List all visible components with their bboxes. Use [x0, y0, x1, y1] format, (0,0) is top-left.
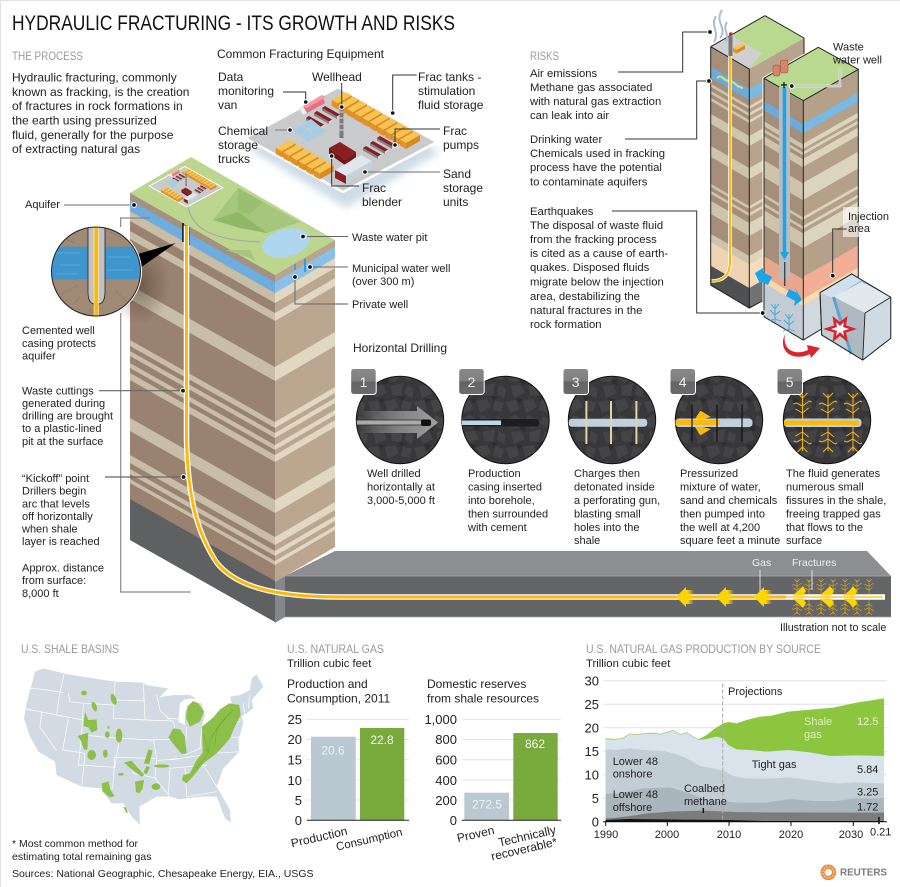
panel: tower A, gas well [707, 10, 804, 308]
well pipe: vertical drilling curving horizontal [186, 226, 885, 597]
equipment labels: stimulation [418, 84, 475, 98]
equipment callout lines [275, 75, 440, 186]
equipment labels: pumps [443, 138, 479, 152]
labels: left side: Waste cuttings [22, 386, 94, 398]
labels: left side: off horizontally [22, 511, 93, 523]
heading: production by source [586, 642, 821, 670]
text block: risks: from the fracking process [530, 234, 657, 246]
equipment labels: van [218, 98, 237, 112]
step 4: pressurized mixture: sand and chemicals [680, 495, 778, 507]
area: coalbed methane [606, 811, 884, 822]
text block: the process: known as fracking, is the creation [12, 85, 189, 99]
bar chart: production and consumption 2011 [287, 677, 409, 854]
label: injection area: Injection [848, 211, 889, 223]
labels: left side: from surface: [22, 575, 86, 587]
equipment labels: blender [362, 195, 402, 209]
step 1: well drilled horizontally: Well drilled [367, 468, 421, 480]
text block: risks: can leak into air [530, 110, 609, 122]
text block: the process: fluid, generally for the purpose [12, 128, 174, 142]
bar chart: domestic reserves: Domestic reserves [427, 677, 526, 691]
heading: equipment: Common Fracturing Equipment [217, 47, 385, 61]
footnote and sources: * Most common method for [12, 838, 139, 850]
text block: risks: with natural gas extraction [529, 96, 661, 108]
equipment labels [218, 70, 484, 209]
injection arrows [755, 268, 802, 306]
bar chart: domestic reserves [424, 677, 561, 864]
disposal well shaft [779, 87, 790, 280]
labels: left side: to a plastic-lined [22, 423, 102, 435]
label: injection area [831, 207, 889, 278]
step 4: pressurized mixture: square feet a minute [680, 535, 780, 547]
fault cube detail [820, 274, 891, 360]
heading: production by source: Trillion cubic feet [586, 658, 671, 670]
step 3: perforating charges: shale [574, 535, 600, 547]
badge 3 [563, 368, 588, 394]
labels: left side: when shale [21, 524, 78, 536]
step 5: fissures release gas: that flows to the [786, 522, 863, 534]
badge 2 [459, 368, 484, 394]
badge 2: 2 [468, 374, 476, 390]
step 1: well drilled horizontally: horizontally at [367, 482, 435, 494]
equipment labels: Frac [362, 181, 386, 195]
area chart: natural gas production by source: 2010 [717, 829, 741, 841]
text block: risks: to contaminate aquifers [530, 176, 648, 188]
labels: surface water [352, 232, 450, 311]
area chart: natural gas production by source: 2030 [839, 829, 863, 841]
labels: left side: aquifer [22, 350, 56, 362]
labels: left side: Aquifer [25, 199, 60, 211]
Reuters logo [820, 864, 887, 880]
labels: left side: generated during [22, 398, 105, 410]
step 4: pressurized mixture: Pressurized [680, 468, 738, 480]
area chart: natural gas production by source: 30 [585, 674, 599, 688]
labels: left side: pit at the surface [22, 436, 103, 448]
labels: left side: drilling are brought [22, 410, 113, 422]
labels: left side: “Kickoff” point [22, 473, 89, 485]
badge 4: 4 [679, 374, 687, 390]
bar chart: domestic reserves: 0 [450, 813, 457, 828]
step 5: fissures release gas: surface [786, 535, 822, 547]
text block: risks: Air emissions [530, 68, 598, 80]
text block: risks: Earthquakes [530, 206, 594, 218]
labels: left side: Cemented well [22, 325, 95, 337]
area chart: natural gas production by source: 5.84 [857, 764, 878, 776]
labels: left side: 8,000 ft [22, 588, 59, 600]
labels: left side: casing protects [22, 338, 96, 350]
step 3: perforating charges: blasting small [574, 508, 641, 520]
panel: rock block cross-section [110, 157, 335, 622]
Reuters logo: REUTERS [840, 867, 887, 879]
map: U.S. shale basins [24, 668, 263, 825]
area chart: natural gas production by source: Lower 48 [613, 756, 658, 768]
step 4: pressurized mixture: then pumped into [680, 508, 765, 520]
text block: risks: quakes. Disposed fluids [530, 262, 650, 274]
air emission plume [714, 10, 727, 42]
labels: left side: arc that levels [22, 498, 90, 510]
step 5: fissures release gas: freeing trapped gas [786, 508, 881, 520]
area chart: natural gas production by source: gas [804, 729, 822, 741]
icon: red rotation arrow [783, 334, 820, 358]
area: lower 48 offshore [606, 787, 884, 822]
labels: surface water: Waste water pit [352, 232, 427, 244]
text block: risks: natural fractures in the [530, 305, 642, 317]
area: lower 48 onshore [606, 748, 884, 822]
area chart: natural gas production by source: Coalbed [684, 783, 725, 795]
area chart: natural gas production by source: onshore [613, 768, 652, 780]
text block: the process: of fractures in rock formations in [12, 99, 183, 113]
step 5: fissures release gas: numerous small [786, 482, 864, 494]
text block: risks: process have the potential [530, 162, 662, 174]
heading: U.S. natural gas [287, 642, 384, 670]
gas flow arrows and fractures in shale [676, 579, 885, 615]
footnote and sources [12, 838, 314, 880]
area chart: natural gas production by source: Projections [728, 686, 783, 698]
labels: surface water: (over 300 m) [352, 276, 414, 288]
equipment pad illustration [245, 87, 437, 192]
step 2: production casing [459, 368, 549, 534]
equipment labels: storage [218, 138, 258, 152]
heading: U.S. natural gas: Trillion cubic feet [287, 658, 372, 670]
step 4: pressurized mixture: the well at 4,200 [680, 522, 760, 534]
shale labels: Fractures [792, 557, 836, 569]
area chart: natural gas production by source: Shale [804, 716, 832, 728]
bar chart: production and consumption 2011: Consumption [335, 827, 404, 854]
badge 4 [670, 368, 696, 394]
footnote and sources: Sources: National Geographic, Chesapeake Energy, EIA., USGS [12, 868, 314, 880]
area chart: natural gas production by source: 3.25 [857, 786, 878, 798]
waste well callout [793, 67, 840, 86]
area chart: natural gas production by source: offshore [613, 802, 652, 814]
footnote and sources: estimating total remaining gas [12, 851, 152, 863]
step 5: fissures release gas [777, 368, 886, 547]
bar chart: production and consumption 2011: 20.6 [321, 744, 345, 758]
bar chart: production and consumption 2011: 5 [295, 793, 302, 808]
area chart: natural gas production by source: 25 [585, 697, 599, 712]
text block: risks: migrate below the injection [530, 276, 664, 288]
equipment labels: Frac [443, 124, 467, 138]
area chart: natural gas production by source: 2000 [655, 829, 679, 841]
callout: casing magnifier [50, 224, 176, 319]
equipment labels: Wellhead [312, 70, 362, 84]
note: illustration not to scale: Illustration not to scale [780, 622, 886, 634]
step 2: production casing: Production [468, 468, 521, 480]
bar chart: domestic reserves: Proven [455, 823, 496, 845]
badge 1: 1 [360, 374, 368, 390]
bar chart: production and consumption 2011: Production [290, 824, 349, 850]
area chart: natural gas production by source [585, 674, 891, 841]
text block: risks: Chemicals used in fracking [530, 148, 665, 160]
bar chart: domestic reserves: 272.5 [472, 798, 502, 812]
labels: left side [21, 199, 113, 600]
step 2: production casing: with cement [467, 522, 527, 534]
text block: the process [12, 49, 189, 156]
step 4: pressurized mixture [670, 368, 780, 547]
equipment labels: Frac tanks - [418, 70, 481, 84]
equipment labels: Sand [443, 167, 471, 181]
step 2: production casing: into borehole, [468, 495, 535, 507]
area chart: natural gas production by source: methane [684, 796, 727, 808]
labels: left side: Approx. distance [22, 562, 104, 574]
bar chart: production and consumption 2011: 25 [288, 712, 302, 727]
label: waste water well: water well [832, 54, 882, 66]
panel: tower B, waste water well [755, 47, 858, 340]
area chart: natural gas production by source: 0.21 [870, 827, 891, 839]
heading: U.S. natural gas: U.S. NATURAL GAS [287, 642, 384, 656]
equipment labels: trucks [218, 152, 250, 166]
area chart: natural gas production by source: 15 [585, 744, 599, 759]
blue fractures [769, 304, 781, 322]
step 3: perforating charges: detonated inside [574, 482, 655, 494]
text block: risks: The disposal of waste fluid [530, 220, 663, 232]
labels: surface water: Private well [352, 299, 408, 311]
text block: risks: Methane gas associated [530, 82, 652, 94]
area chart: natural gas production by source: 1990 [594, 829, 618, 841]
labels: left side: layer is reached [22, 536, 100, 548]
callout lines: left side [64, 203, 348, 592]
tower A right face [749, 38, 804, 308]
text block: the process: the earth using pressurized [12, 114, 157, 128]
step 4: pressurized mixture: mixture of water, [680, 482, 761, 494]
equipment labels: storage [443, 181, 483, 195]
tower B right face [803, 70, 858, 340]
shale labels [752, 557, 836, 592]
contaminant squiggle [717, 76, 743, 88]
equipment labels: units [443, 195, 468, 209]
earthquake burst [823, 316, 857, 342]
bar chart: domestic reserves: 800 [435, 732, 457, 747]
well casing through aquifer [183, 223, 189, 245]
step 2: production casing: then surrounded [468, 508, 548, 520]
waste tanks [773, 60, 788, 76]
bar chart: production and consumption 2011: 20 [288, 732, 302, 747]
text block: risks: rock formation [530, 319, 602, 331]
equipment labels: fluid storage [418, 98, 484, 112]
step 1: well drilled horizontally: 3,000-5,000 ft [367, 495, 435, 507]
bar chart: production and consumption 2011: Production and [287, 677, 368, 691]
area chart: natural gas production by source: 12.5 [857, 716, 878, 728]
shale labels: Gas [752, 557, 771, 569]
labels: left side: Drillers begin [22, 486, 86, 498]
heading: production by source: U.S. NATURAL GAS PRODUCTION BY SOURCE [586, 642, 821, 656]
bar chart: production and consumption 2011: 15 [288, 752, 302, 768]
label: waste water well: Waste [833, 42, 864, 54]
area: shale gas [606, 698, 884, 822]
text block: risks: RISKS [530, 49, 559, 63]
step 5: fissures release gas: fissures in the shale, [786, 495, 886, 507]
step 1: well drilled horizontally [351, 368, 444, 507]
text block: the process: THE PROCESS [12, 49, 83, 63]
left face strata [130, 193, 275, 622]
bar chart: domestic reserves: Technically [497, 823, 557, 850]
label: injection area: area [848, 223, 871, 235]
heading: U.S. shale basins: U.S. SHALE BASINS [21, 642, 119, 656]
area chart: natural gas production by source: Lower 48 [613, 789, 658, 801]
equipment labels: Chemical [218, 124, 268, 138]
bar chart: domestic reserves: 862 [525, 737, 545, 751]
right face strata [275, 240, 335, 582]
bar chart: domestic reserves: 600 [435, 752, 457, 768]
equipment labels: Data [218, 70, 244, 84]
badge 5: 5 [786, 374, 794, 390]
labels: surface water: Municipal water well [352, 263, 450, 275]
area: other [606, 819, 884, 822]
area chart: natural gas production by source: 10 [585, 768, 599, 782]
area chart: natural gas production by source: 1.72 [857, 802, 878, 814]
label: waste water well [832, 42, 882, 66]
area chart: natural gas production by source: Tight gas [752, 759, 797, 771]
step 2: production casing: casing inserted [468, 482, 542, 494]
badge 3: 3 [572, 374, 580, 390]
step 3: perforating charges: Charges then [574, 468, 640, 480]
panel: common fracturing equipment [217, 47, 484, 209]
heading: horizontal drilling: Horizontal Drilling [353, 341, 447, 355]
bar chart: domestic reserves: 400 [435, 773, 457, 788]
equipment labels: monitoring [218, 84, 274, 98]
bar chart: production and consumption 2011: 22.8 [370, 733, 394, 747]
step 5: fissures release gas: The fluid generates [786, 468, 881, 480]
title: HYDRAULIC FRACTURING - ITS GROWTH AND RISKS [12, 12, 455, 35]
gas well pipe [712, 55, 730, 281]
tower A left face [711, 47, 749, 308]
badge 5 [777, 368, 802, 394]
bar chart: domestic reserves: 200 [435, 793, 457, 808]
text block: risks: is cited as a cause of earth- [530, 248, 668, 260]
area chart: natural gas production by source: 5 [592, 791, 599, 806]
text block: risks: area, destabilizing the [530, 291, 640, 303]
text block: risks: Drinking water [530, 134, 602, 146]
step 3: perforating charges: holes into the [574, 522, 639, 534]
bar chart: domestic reserves: from shale resources [427, 692, 539, 706]
area: tight gas [606, 731, 884, 822]
step 3: perforating charges [563, 368, 660, 547]
area chart: natural gas production by source: 20 [585, 720, 599, 736]
bar chart: production and consumption 2011: 10 [288, 773, 302, 788]
panel: horizontal shale layer [275, 551, 891, 623]
tower B left face [764, 78, 803, 340]
area chart: natural gas production by source: 2020 [779, 829, 803, 841]
water wells [304, 259, 306, 272]
area chart: natural gas production by source: 0 [592, 814, 599, 830]
bar chart: production and consumption 2011: 0 [295, 813, 302, 828]
surface with well pad, hills and pit [130, 157, 335, 275]
bar chart: production and consumption 2011: Consumption, 2011 [287, 692, 391, 706]
risks callout lines [612, 32, 760, 313]
bar chart: domestic reserves: recoverable* [490, 835, 559, 864]
text block: risks [529, 49, 668, 331]
text block: the process: Hydraulic fracturing, commonly [12, 70, 177, 84]
text block: the process: of extracting natural gas [12, 142, 140, 156]
bar chart: domestic reserves: 1,000 [424, 712, 457, 727]
step 3: perforating charges: a perforating gun, [574, 495, 660, 507]
